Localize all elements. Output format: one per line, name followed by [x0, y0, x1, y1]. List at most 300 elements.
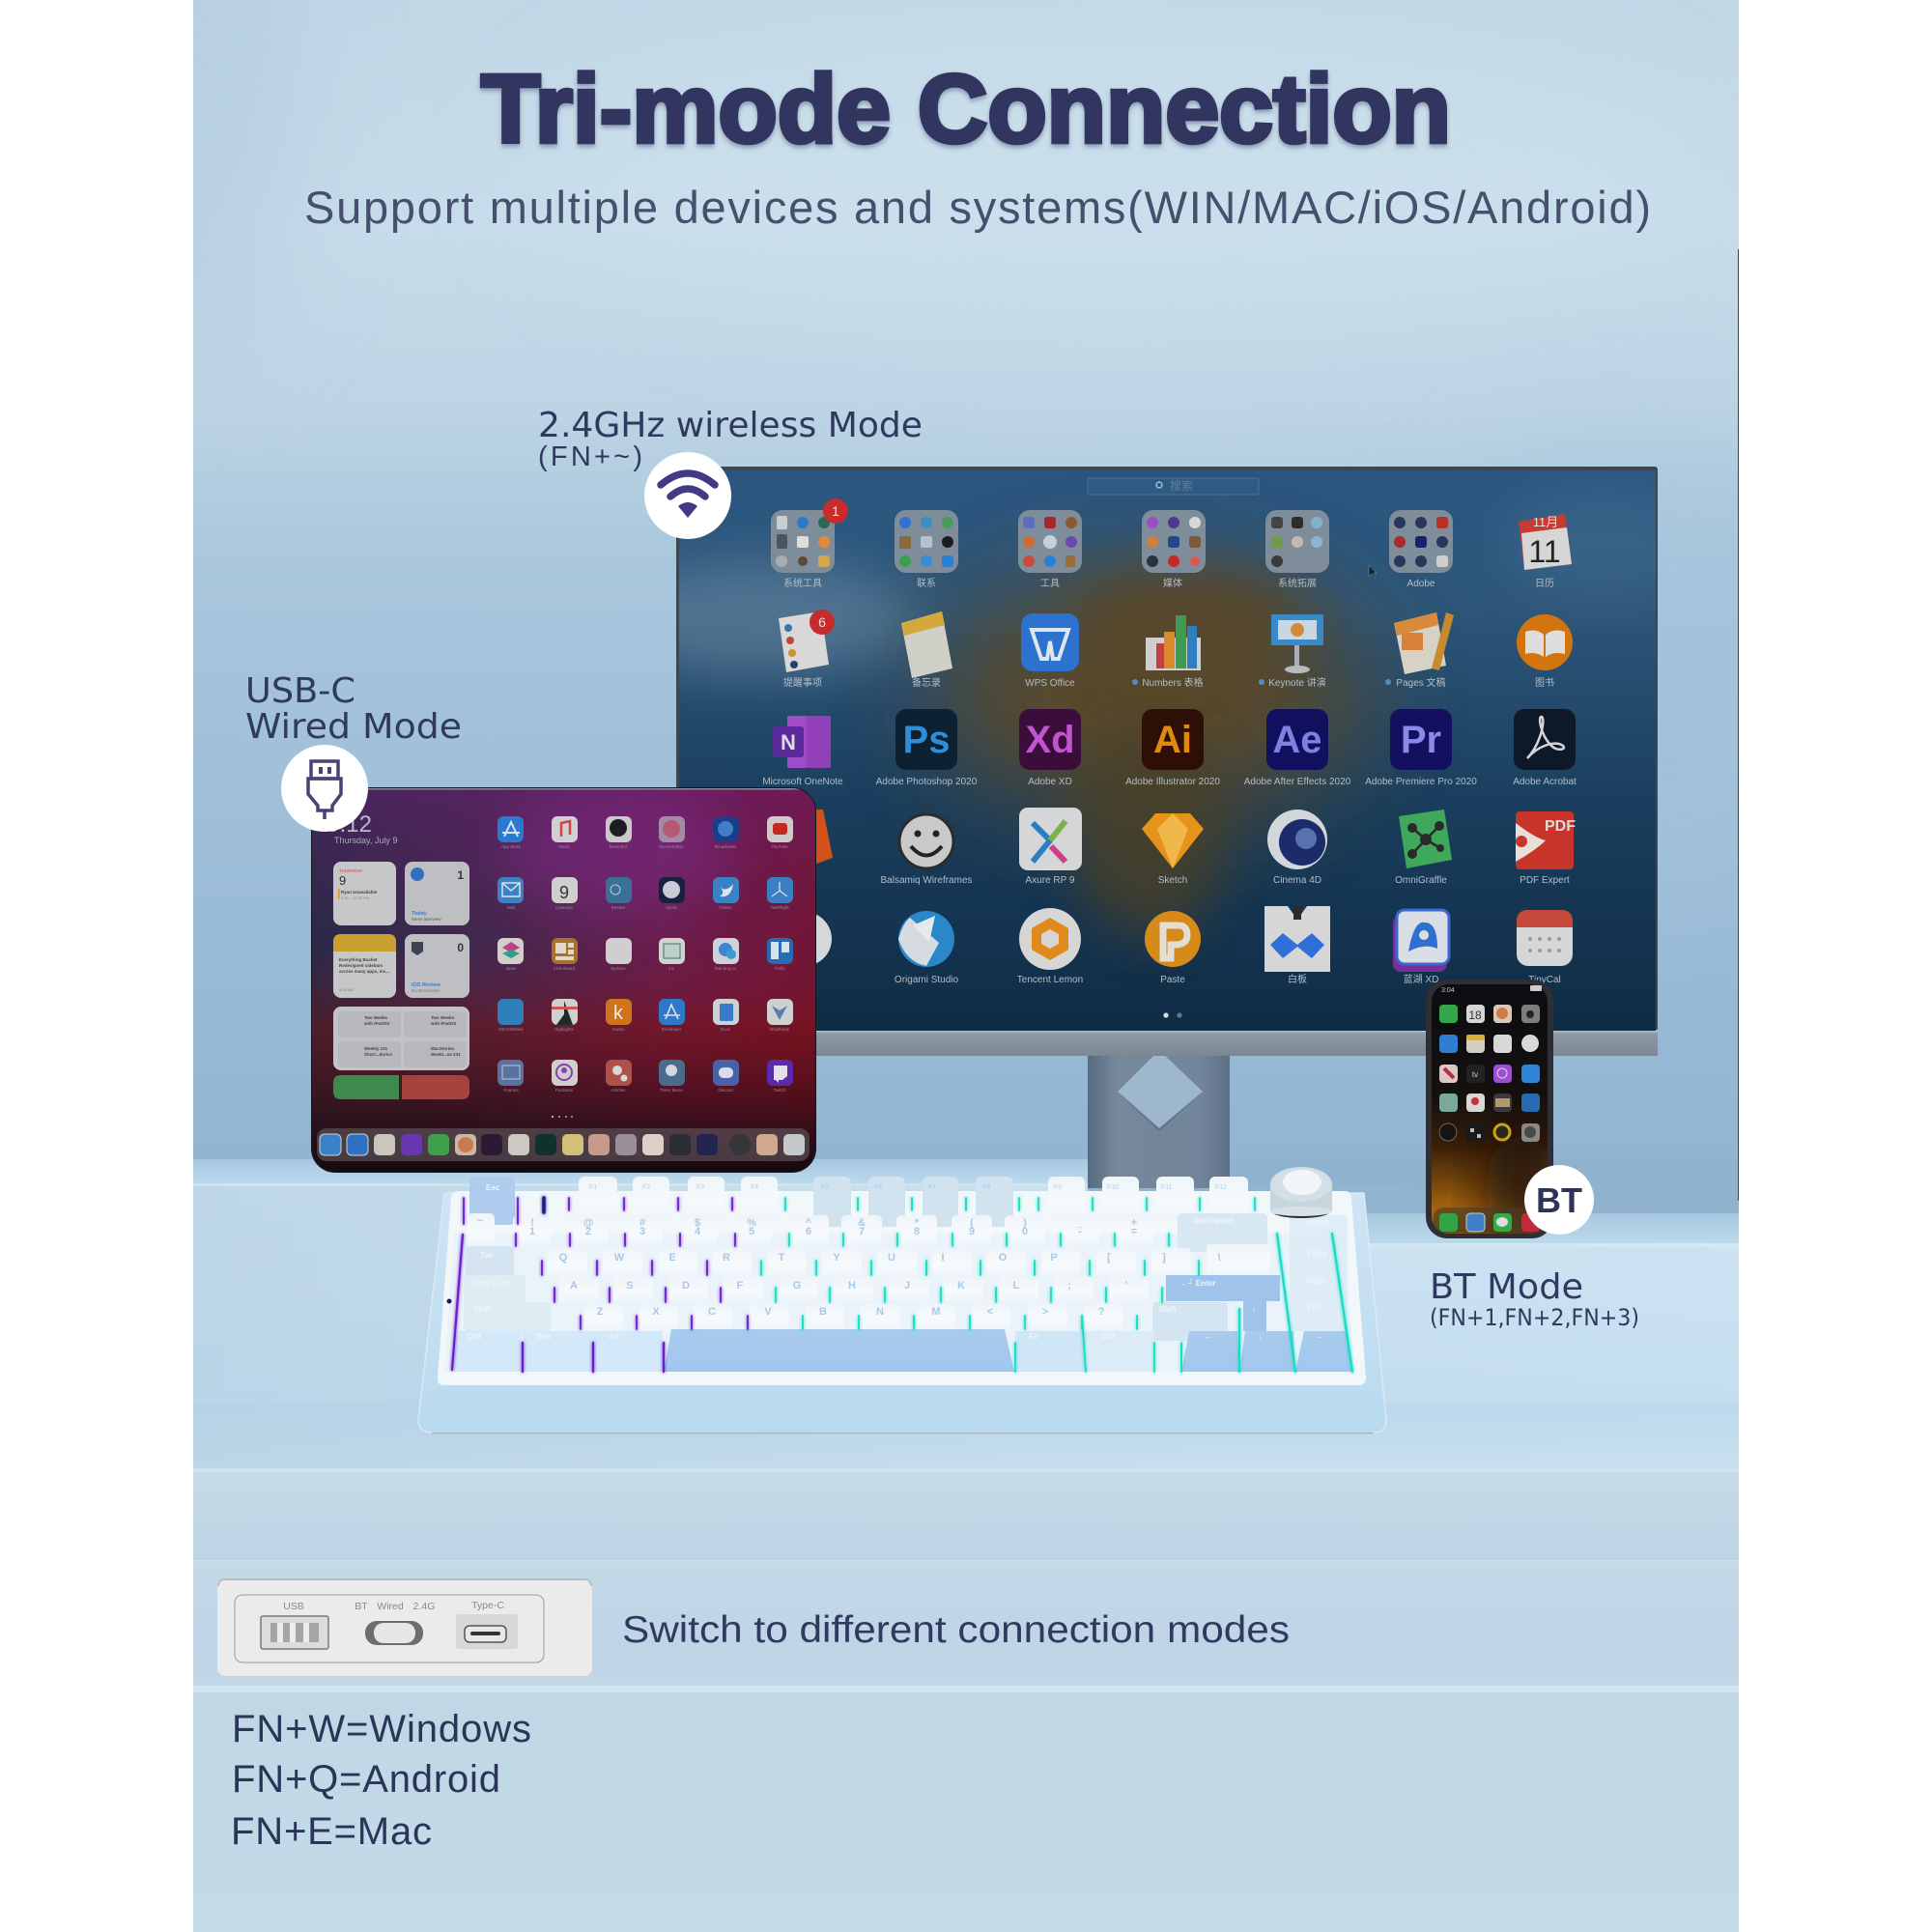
- calendar icon: 日历: [1535, 578, 1554, 589]
- row 1 apps: App Store: [501, 844, 522, 849]
- widget: calendar: 8:30 – 10:30 PM: [341, 895, 369, 900]
- number row: 1: [529, 1226, 535, 1237]
- keyboard plate: [438, 1191, 1366, 1385]
- bottom letter row: C: [708, 1306, 716, 1318]
- search box: 搜索: [1170, 478, 1193, 493]
- row 2 apps: Apollo: [666, 905, 678, 910]
- widget: ios review: No Reminders: [412, 988, 440, 993]
- widget: news: Everything Bucket: [339, 957, 378, 962]
- phone app grid: tv: [1472, 1070, 1478, 1079]
- widget: wide articles: Weekly 231: [364, 1046, 388, 1051]
- lemon icon: Tencent Lemon: [1017, 975, 1083, 985]
- icon: usb plug badge: [281, 745, 368, 832]
- lanhu xd icon: [1393, 910, 1449, 985]
- backlight glow purple: [452, 1198, 748, 1372]
- row 4 apps: Developer: [662, 1027, 682, 1032]
- row 5 apps: Podcasts: [555, 1088, 574, 1093]
- row 3 apps: Iris: [668, 966, 675, 971]
- xd icon: [1019, 709, 1081, 787]
- folder: tools: [1018, 510, 1082, 589]
- folder: system tools: 1: [832, 503, 839, 519]
- axure icon: [1019, 808, 1082, 886]
- home row: J: [904, 1280, 910, 1292]
- acrobat icon: [1513, 709, 1577, 787]
- illustrator icon: Adobe Illustrator 2020: [1125, 777, 1220, 787]
- row 2 apps: Calendar: [555, 905, 574, 910]
- qwerty row: T: [779, 1252, 785, 1264]
- home row: [464, 1275, 1149, 1304]
- number row: 8: [914, 1226, 920, 1237]
- icon: BT badge: [1524, 1165, 1594, 1235]
- function key row: F12: [1215, 1184, 1227, 1191]
- subtitle: Support multiple devices and systems(WIN/MAC/iOS/Android): [304, 182, 1651, 233]
- qwerty row: E: [668, 1252, 676, 1264]
- cinema 4d icon: [1267, 810, 1327, 886]
- home row: Caps Lock: [471, 1279, 511, 1288]
- function key row: F9: [1054, 1184, 1062, 1191]
- enter key: ↑: [1252, 1305, 1256, 1314]
- widget: calendar: [333, 862, 396, 925]
- paste icon: Paste: [1160, 975, 1185, 985]
- after effects icon: [1244, 709, 1351, 787]
- widget: wide articles: Weekl...ue 231: [431, 1052, 461, 1057]
- home row: ': [1125, 1280, 1128, 1292]
- switch labels: BT: [355, 1601, 368, 1612]
- widget: wide articles: Two Weeks: [431, 1015, 455, 1020]
- pdf expert icon: [1516, 811, 1576, 886]
- row 1 apps: Broadcasts: [715, 844, 737, 849]
- numbers icon: Numbers 表格: [1142, 676, 1204, 689]
- phone status bar: [1441, 985, 1542, 994]
- cinema 4d icon: Cinema 4D: [1273, 875, 1321, 886]
- row 1 apps: MusicBot: [610, 844, 628, 849]
- cursor: [1369, 565, 1377, 579]
- tablet app grid: [497, 816, 793, 1093]
- numbers icon: [1132, 615, 1204, 689]
- row 4 apps: Highlights: [554, 1027, 575, 1032]
- keyboard knob: [1270, 1167, 1332, 1218]
- books icon: 图书: [1535, 677, 1554, 689]
- row 2 apps: Reeder: [611, 905, 626, 910]
- row 2 apps: [497, 877, 793, 910]
- pdf expert icon: PDF Expert: [1520, 875, 1570, 886]
- widget: news: 9:10 AM: [339, 987, 354, 992]
- title: Tri-mode Connection: [481, 55, 1451, 163]
- illustrator icon: Ai: [1153, 719, 1192, 761]
- notes icon: 备忘录: [912, 676, 941, 689]
- pages icon: Pages 文稿: [1396, 676, 1446, 689]
- number row: #: [639, 1217, 645, 1229]
- bottom letter row: V: [764, 1306, 772, 1318]
- home row: A: [570, 1280, 578, 1292]
- folder: media: [1142, 510, 1206, 589]
- monitor: [676, 467, 1658, 1188]
- home row: F: [737, 1280, 744, 1292]
- modifier and space row: →: [1316, 1332, 1323, 1341]
- widget: wide articles: [333, 1007, 469, 1070]
- label: USB-C wired mode: USB-C: [245, 671, 355, 711]
- row 4 apps: DEVONthink: [498, 1027, 525, 1032]
- sketch icon: Sketch: [1158, 875, 1187, 886]
- page background: [193, 0, 1739, 1932]
- bottom letter row: X: [652, 1306, 660, 1318]
- modifier and space row: Ctrl: [1101, 1332, 1115, 1341]
- pdf expert icon: PDF: [1545, 818, 1576, 835]
- row 2 apps: TestFlight: [770, 905, 789, 910]
- widget: reminders: Today: [412, 911, 428, 917]
- phone app grid: 18: [1468, 1009, 1482, 1022]
- reminders icon: [779, 610, 835, 689]
- onenote icon: [762, 716, 843, 787]
- tablet page dots: [552, 1116, 573, 1118]
- switch labels: Wired: [377, 1601, 404, 1612]
- widget: calendar: 9: [339, 873, 346, 888]
- widget: calendar: Ryan Unavailable: [341, 890, 378, 895]
- search box: [1088, 478, 1259, 495]
- function key row: F8: [982, 1184, 990, 1191]
- launchpad row 3: [762, 709, 1577, 787]
- number row: 7: [859, 1226, 865, 1237]
- tablet clock: [327, 811, 397, 845]
- qwerty row: Tab: [480, 1251, 494, 1260]
- folder: extensions: [1265, 510, 1329, 589]
- whiteboard icon: 白板: [1288, 973, 1307, 985]
- keyboard: [418, 1167, 1386, 1434]
- xd icon: Adobe XD: [1028, 777, 1072, 787]
- number row: -: [1078, 1226, 1082, 1237]
- widget: shortcuts bar: [333, 1075, 469, 1099]
- label: USB-C wired mode: Wired Mode: [245, 707, 462, 747]
- number row: ~: [477, 1215, 484, 1227]
- qwerty row: R: [723, 1252, 730, 1264]
- icon: BT badge: BT: [1536, 1180, 1582, 1220]
- bottom letter row: <: [987, 1306, 993, 1318]
- number row: 4: [695, 1226, 701, 1237]
- xd icon: Xd: [1025, 719, 1075, 761]
- number row: =: [1131, 1226, 1137, 1237]
- home row: G: [793, 1280, 801, 1292]
- phone dock: [1434, 1208, 1546, 1233]
- photoshop icon: [876, 709, 978, 787]
- tablet clock: Thursday, July 9: [334, 836, 397, 845]
- omnigraffle icon: [1395, 810, 1452, 886]
- row 2 apps: Mail: [507, 905, 515, 910]
- number row: [468, 1213, 1267, 1252]
- qwerty row: [466, 1244, 1270, 1279]
- onenote icon: N: [781, 730, 796, 754]
- bottom letter row: Shift: [1159, 1305, 1177, 1314]
- row 3 apps: Club Board: [554, 966, 576, 971]
- label: BT mode: BT Mode: [1430, 1267, 1583, 1307]
- row 5 apps: Frames: [503, 1088, 519, 1093]
- mode switch slider: [365, 1621, 423, 1645]
- launchpad row 1: [771, 498, 1572, 589]
- bottom letter row: M: [931, 1306, 941, 1318]
- illustrator icon: [1125, 709, 1220, 787]
- wps icon: [1021, 613, 1079, 689]
- qwerty row: P: [1050, 1252, 1058, 1264]
- folder: adobe: Adobe: [1407, 579, 1435, 589]
- system shortcuts: FN+W=Windows: [232, 1708, 531, 1750]
- tablet dock: [317, 1128, 810, 1161]
- launchpad row 4: [811, 808, 1576, 886]
- row 5 apps: [497, 1060, 793, 1093]
- switch labels: [283, 1600, 504, 1612]
- label: BT mode: [1430, 1267, 1639, 1331]
- pages icon: [1385, 612, 1454, 689]
- switch labels: 2.4G: [413, 1601, 435, 1612]
- folder: extensions: 系统拓展: [1278, 577, 1317, 589]
- modifier and space row: ←: [1205, 1332, 1212, 1341]
- widget: wide articles: Two Weeks: [364, 1015, 388, 1020]
- bottom letter row: B: [819, 1306, 827, 1318]
- reminders icon: 提醒事项: [783, 676, 822, 689]
- widget: reminders: [405, 862, 469, 925]
- widget: news: Redesigned sidebars: [339, 963, 384, 968]
- backlight glow cyan: [761, 1198, 1352, 1372]
- reminders icon: 6: [818, 614, 826, 630]
- row 3 apps: [497, 938, 793, 971]
- page dots: [1163, 1012, 1182, 1018]
- white icon behind tablet: [778, 912, 832, 966]
- folder: system tools: 系统工具: [783, 577, 822, 589]
- modifier and space row: Alt: [609, 1332, 619, 1341]
- sketch icon: [1142, 813, 1204, 886]
- number row: _: [1076, 1217, 1084, 1229]
- home row: H: [848, 1280, 856, 1292]
- right column keys: [1290, 1215, 1348, 1331]
- widget: wide articles: Short...dorice: [364, 1052, 393, 1057]
- qwerty row: [: [1107, 1252, 1111, 1264]
- bottom letter row: ?: [1098, 1306, 1105, 1318]
- widget: news: across many apps, inc...: [339, 969, 389, 974]
- function key row: F3: [696, 1184, 704, 1191]
- premiere icon: Pr: [1401, 719, 1441, 761]
- right column keys: End: [1307, 1303, 1321, 1312]
- row 3 apps: Trello: [774, 966, 785, 971]
- switch labels: Type-C: [471, 1600, 504, 1611]
- after effects icon: Adobe After Effects 2020: [1244, 777, 1351, 787]
- modifier and space row: Win: [536, 1332, 551, 1341]
- row 5 apps: Timer Menu: [660, 1088, 683, 1093]
- label: 2.4GHz mode: (FN+~): [538, 441, 642, 472]
- function key row: F11: [1161, 1184, 1173, 1191]
- widget: calendar: THURSDAY: [339, 868, 362, 873]
- tablet: [311, 782, 816, 1173]
- balsamiq icon: [880, 814, 973, 886]
- widget: wide articles: with iPadOS: [430, 1021, 456, 1026]
- after effects icon: Ae: [1272, 719, 1322, 761]
- usb port: [261, 1616, 328, 1649]
- number row: ): [1023, 1217, 1027, 1229]
- right column keys: PgDn: [1307, 1277, 1327, 1286]
- premiere icon: Adobe Premiere Pro 2020: [1365, 777, 1477, 787]
- number row: 5: [749, 1226, 754, 1237]
- function key row: F2: [642, 1184, 650, 1191]
- widget: reminders: Steve interview: [412, 917, 441, 922]
- number row: &: [858, 1217, 866, 1229]
- origami icon: [895, 911, 959, 985]
- phone status bar: 3:04: [1441, 987, 1455, 994]
- enter key: [1166, 1275, 1280, 1331]
- number row: 9: [969, 1226, 975, 1237]
- switch labels: USB: [283, 1601, 304, 1612]
- qwerty row: U: [888, 1252, 895, 1264]
- widget: news: [333, 934, 396, 998]
- lemon icon: [1017, 908, 1083, 985]
- tablet clock: 9:12: [327, 811, 372, 838]
- row 5 apps: Articles: [611, 1088, 626, 1093]
- number row: ← Backspace: [1183, 1216, 1235, 1225]
- bottom letter row: N: [876, 1306, 884, 1318]
- notes icon: [901, 611, 952, 689]
- qwerty row: O: [999, 1252, 1008, 1264]
- widget: ios review: 0: [457, 941, 464, 954]
- label: 2.4GHz mode: [538, 406, 923, 472]
- row 1 apps: MusicHarbor: [659, 844, 684, 849]
- books icon: [1517, 614, 1573, 689]
- function key row: F1: [589, 1184, 597, 1191]
- row 3 apps: Bynario: [611, 966, 626, 971]
- modifier and space row: [452, 1329, 1352, 1372]
- launchpad row 2: [779, 610, 1573, 689]
- system shortcuts: FN+E=Mac: [231, 1810, 432, 1853]
- folder: adobe: [1389, 510, 1453, 589]
- row 4 apps: Kodex: [612, 1027, 625, 1032]
- row 3 apps: Ideas: [505, 966, 517, 971]
- folder: media: 媒体: [1163, 578, 1182, 589]
- widget: wide articles: with iPadOS: [363, 1021, 389, 1026]
- folder: contacts: [895, 510, 958, 589]
- acrobat icon: Adobe Acrobat: [1513, 777, 1577, 787]
- orange icon behind tablet: [811, 810, 833, 866]
- function key row: F7: [928, 1184, 936, 1191]
- widget: reminders: 1: [457, 868, 464, 882]
- widget: wide articles: MacStories: [431, 1046, 455, 1051]
- number row: @: [583, 1217, 594, 1229]
- number row: +: [1131, 1217, 1137, 1229]
- label: 2.4GHz mode: 2.4GHz wireless Mode: [538, 406, 923, 445]
- row 2 apps: Twitter: [719, 905, 732, 910]
- origami icon: Origami Studio: [895, 975, 959, 985]
- function key row: F5: [821, 1184, 829, 1191]
- home row: L: [1013, 1280, 1020, 1292]
- bottom letter row: Shift: [473, 1305, 491, 1314]
- type-c port: [456, 1614, 518, 1649]
- row 1 apps: YouTube: [771, 844, 788, 849]
- keyboard base: [418, 1193, 1386, 1433]
- modifier and space row: Ctrl: [468, 1332, 481, 1341]
- monitor screen: [679, 470, 1656, 1031]
- qwerty row: \: [1217, 1252, 1221, 1264]
- row 4 apps: Docs: [721, 1027, 731, 1032]
- qwerty row: Y: [833, 1252, 840, 1264]
- tinycal icon: [1517, 910, 1573, 985]
- folder: tools: 工具: [1040, 578, 1060, 589]
- row 4 apps: [497, 999, 793, 1032]
- bottom letter row: Z: [597, 1306, 604, 1318]
- widget: ios review: iOS Review: [412, 982, 441, 988]
- number row: 6: [806, 1226, 811, 1237]
- bottom letter row: [464, 1302, 1228, 1341]
- row 5 apps: Discord: [718, 1088, 733, 1093]
- icon: wifi badge: [644, 452, 731, 539]
- keynote icon: Keynote 讲演: [1268, 676, 1326, 689]
- calendar icon: 11月: [1533, 515, 1558, 529]
- enter key: ←┘ Enter: [1180, 1278, 1215, 1288]
- row 1 apps: Music: [558, 844, 571, 849]
- label: USB-C wired mode: [245, 671, 462, 747]
- paste icon: [1145, 911, 1201, 985]
- function key row: F6: [874, 1184, 882, 1191]
- number row: 2: [585, 1226, 591, 1237]
- row 4 apps: k: [613, 1003, 624, 1024]
- row 3 apps: Raindrop.io: [714, 966, 737, 971]
- home row: K: [957, 1280, 965, 1292]
- row 2 apps: 9: [559, 883, 569, 902]
- number row: ^: [806, 1217, 812, 1229]
- row 4 apps: MindNode: [770, 1027, 790, 1032]
- phone: [1426, 980, 1556, 1246]
- axure icon: Axure RP 9: [1026, 875, 1075, 886]
- number row: 0: [1022, 1226, 1028, 1237]
- keyboard indicator dot: [446, 1298, 452, 1304]
- home row: D: [682, 1280, 690, 1292]
- photoshop icon: Adobe Photoshop 2020: [876, 777, 978, 787]
- launchpad row 5: [778, 906, 1573, 985]
- whiteboard icon: [1264, 906, 1330, 985]
- home row: ;: [1067, 1280, 1071, 1292]
- row 1 apps: [497, 816, 793, 849]
- home row: S: [626, 1280, 634, 1292]
- folder: contacts: 联系: [917, 578, 936, 589]
- panel: mode switch: [217, 1579, 592, 1676]
- lanhu xd icon: 蓝湖 XD: [1404, 974, 1438, 985]
- photoshop icon: Ps: [903, 719, 950, 761]
- number row: $: [695, 1217, 700, 1229]
- row 5 apps: Twitch: [774, 1088, 786, 1093]
- wps icon: WPS Office: [1025, 678, 1075, 689]
- function key row: Esc: [486, 1183, 500, 1192]
- function key row: [469, 1177, 1248, 1227]
- modifier and space row: Fn: [1029, 1332, 1038, 1341]
- number row: !: [530, 1217, 534, 1229]
- widget: ios review: [405, 934, 469, 998]
- label: BT mode: (FN+1,FN+2,FN+3): [1430, 1304, 1639, 1331]
- onenote icon: Microsoft OneNote: [762, 777, 843, 787]
- function key row: F10: [1107, 1184, 1119, 1191]
- bottom letter row: >: [1042, 1306, 1048, 1318]
- qwerty row: Q: [559, 1252, 568, 1264]
- number row: (: [970, 1217, 974, 1229]
- calendar icon: [1519, 514, 1572, 589]
- keynote icon: [1259, 614, 1326, 689]
- tinycal icon: TinyCal: [1528, 975, 1561, 985]
- number row: *: [915, 1217, 920, 1229]
- omnigraffle icon: OmniGraffle: [1395, 875, 1447, 886]
- monitor stand: [1088, 1050, 1230, 1188]
- system shortcuts: [231, 1708, 531, 1853]
- premiere icon: [1365, 709, 1477, 787]
- calendar icon: 11: [1528, 534, 1561, 569]
- modifier and space row: ↓: [1258, 1332, 1262, 1341]
- system shortcuts: FN+Q=Android: [232, 1758, 500, 1801]
- switch caption: Switch to different connection modes: [622, 1609, 1290, 1651]
- qwerty row: I: [941, 1252, 945, 1264]
- right column keys: PgUp: [1307, 1249, 1327, 1258]
- number row: %: [747, 1217, 756, 1229]
- qwerty row: ]: [1162, 1252, 1166, 1264]
